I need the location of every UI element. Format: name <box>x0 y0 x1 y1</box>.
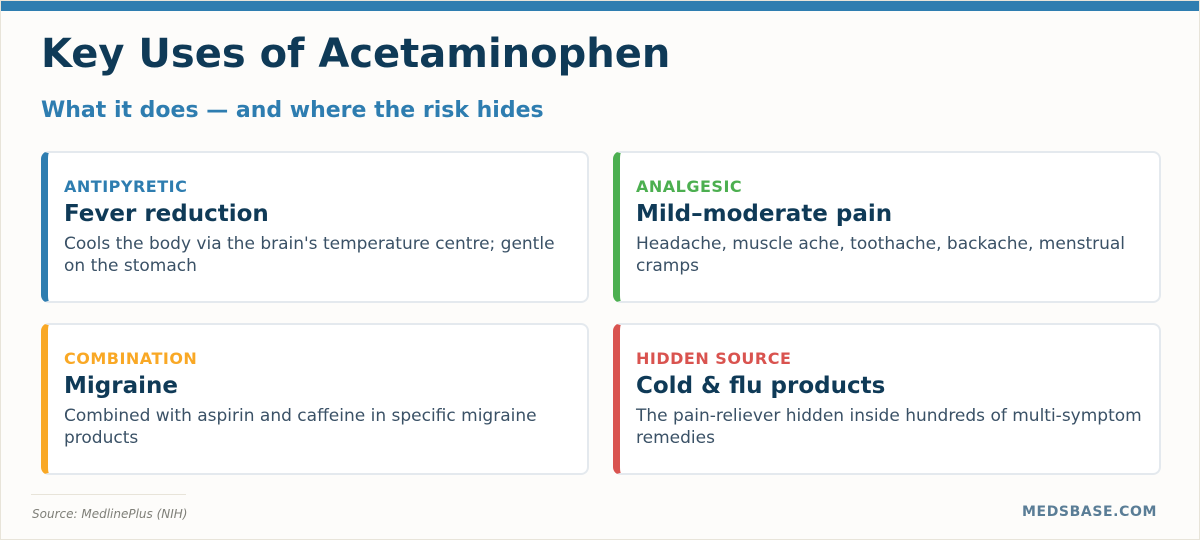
text: pain description <box>636 234 1125 276</box>
label: antipyretic: ANTIPYRETIC <box>64 177 187 196</box>
heading: mild-moderate pain: Mild–moderate pain <box>636 201 892 227</box>
text: pain description: cramps <box>636 256 699 276</box>
heading: cold and flu products: Cold & flu products <box>636 373 885 399</box>
heading: fever reduction: Fever reduction <box>64 201 269 227</box>
heading: migraine: Migraine <box>64 373 178 399</box>
text: cold and flu description: The pain-reliever hidden inside hundreds of multi-symptom <box>636 406 1142 426</box>
panel: fever reduction <box>41 151 589 303</box>
label: hidden source: HIDDEN SOURCE <box>636 349 791 368</box>
title: Key Uses of Acetaminophen <box>41 31 670 77</box>
text: pain description: Headache, muscle ache, toothache, backache, menstrual <box>636 234 1125 254</box>
panel: cold and flu products <box>613 323 1161 475</box>
text: fever description: Cools the body via the brain's temperature centre; gentle <box>64 234 555 254</box>
brand mark: MEDSBASE.COM <box>1022 504 1157 520</box>
panel: migraine <box>41 323 589 475</box>
text: migraine description: Combined with aspirin and caffeine in specific migraine <box>64 406 537 426</box>
text: cold and flu description: remedies <box>636 428 715 448</box>
subtitle: What it does — and where the risk hides <box>41 98 544 122</box>
source note: Source: MedlinePlus (NIH) <box>32 507 188 521</box>
panel: mild-moderate pain <box>613 151 1161 303</box>
text: migraine description <box>64 406 537 448</box>
label: analgesic: ANALGESIC <box>636 177 742 196</box>
text: migraine description: products <box>64 428 138 448</box>
top accent bar <box>1 1 1199 10</box>
text: cold and flu description <box>636 406 1142 448</box>
text: fever description <box>64 234 555 276</box>
text: fever description: on the stomach <box>64 256 197 276</box>
label: combination: COMBINATION <box>64 349 197 368</box>
